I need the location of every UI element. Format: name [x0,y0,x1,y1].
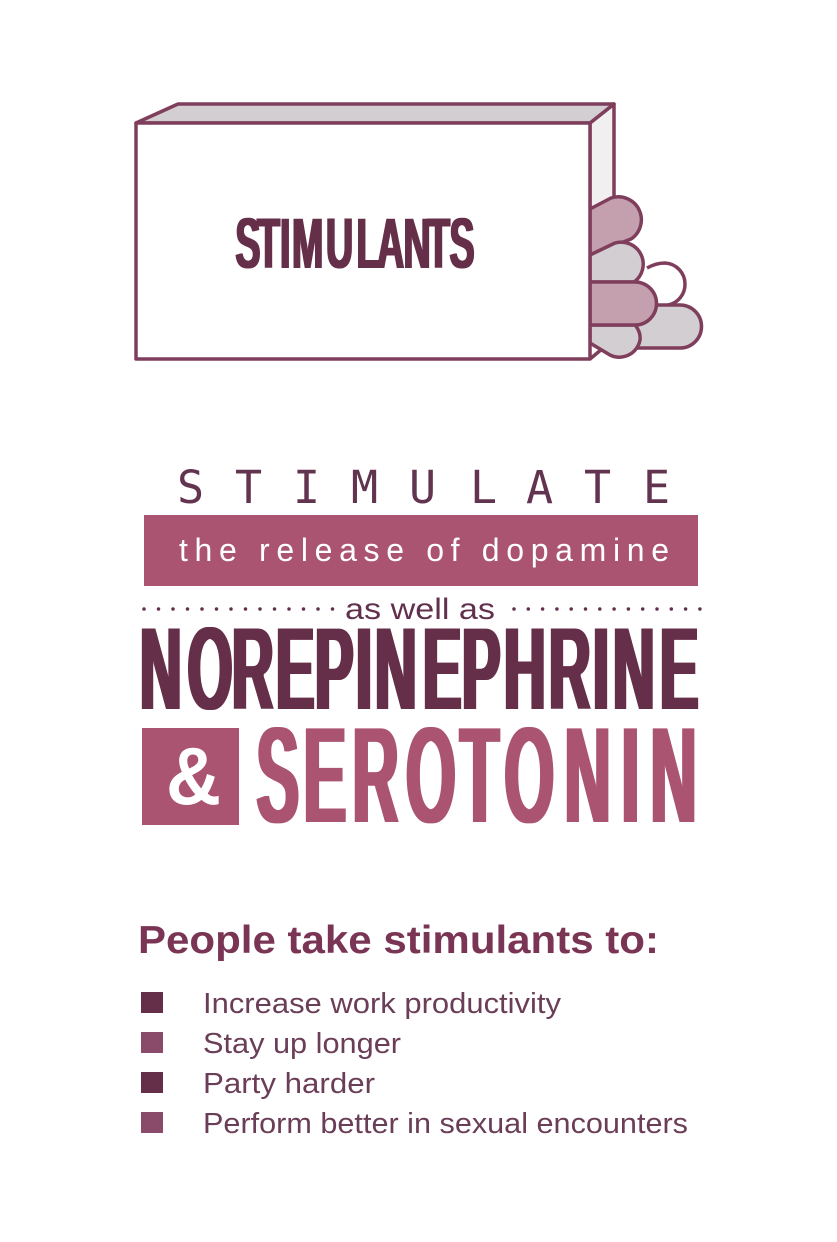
heading: serotonin: SEROTONIN [256,697,697,853]
item 3: Party harder [203,1068,375,1100]
item 1: Increase work productivity [203,988,562,1020]
ampersand badge: & [166,731,221,822]
pill: upper grey [590,242,643,282]
bullet 3 [141,1072,163,1093]
box label: STIMULANTS [235,206,475,284]
bullet 2 [141,1032,163,1053]
bullet 4 [141,1112,163,1133]
box corner [590,349,602,359]
bullet 1 [141,992,163,1013]
subheading: People take stimulants to: [138,919,659,962]
banner: release of dopamine [144,515,698,586]
illustration: pill box [136,104,702,359]
pill: back grey [630,305,702,348]
pill: upper pink [590,197,641,255]
heading: stimulate: STIMULATE [177,461,670,514]
heading: norepinephrine: NOREPINEPHRINE [140,602,698,735]
connector: as well as: as well as [345,593,495,626]
pill: bottom grey [590,325,640,357]
list of reasons [141,988,688,1140]
item 4: Perform better in sexual encounters [203,1108,688,1140]
box top face [136,104,614,123]
pill: middle pink [590,282,656,325]
box front face [136,123,590,359]
pill: back outline [647,263,685,305]
item 2: Stay up longer [203,1028,401,1060]
box side face [590,104,614,215]
banner: release of dopamine: the release of dopamine [179,532,669,568]
ampersand badge [142,728,239,825]
